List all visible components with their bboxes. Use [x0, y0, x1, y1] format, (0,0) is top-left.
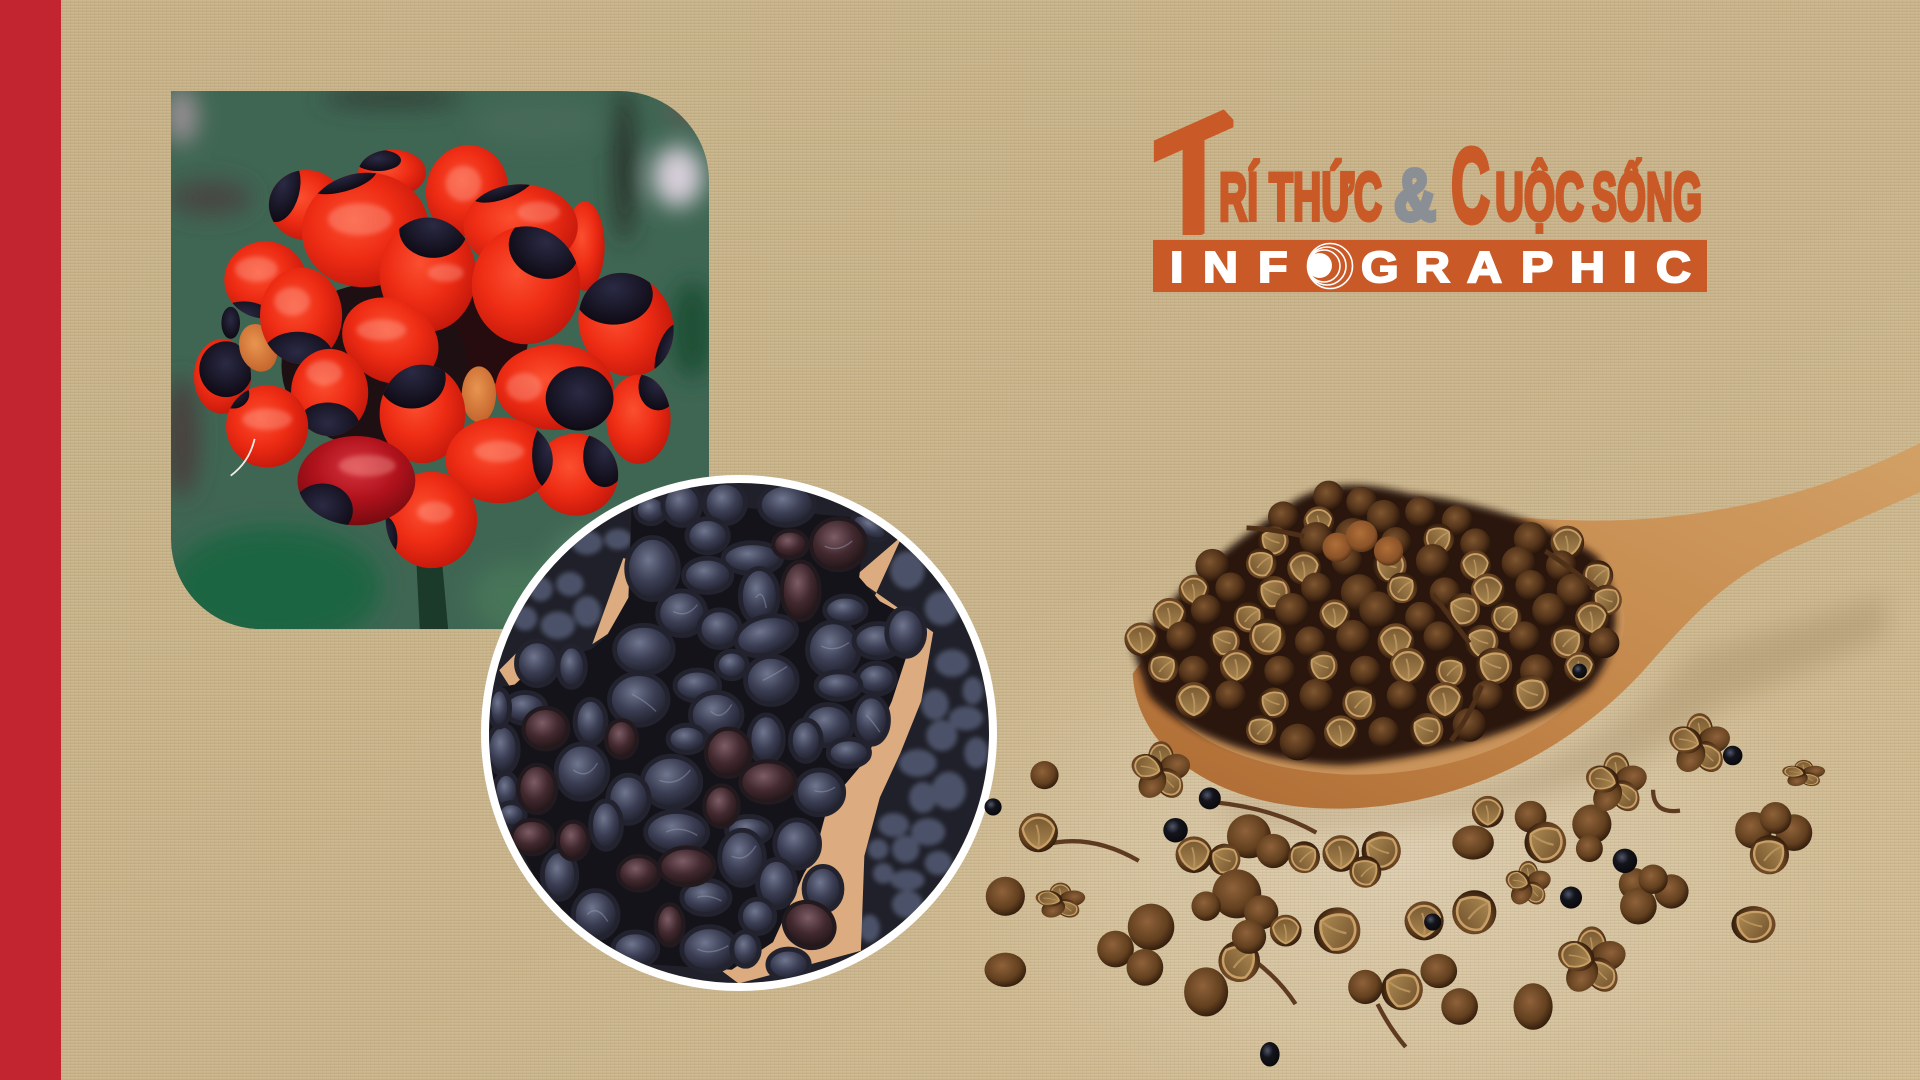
photo: red ginseng berries: [164, 87, 714, 648]
logo wordmark: &: [1394, 156, 1436, 236]
pepper heap base: [1133, 485, 1615, 765]
dark seed bed: [484, 498, 918, 970]
black seeds: [984, 746, 1742, 1067]
dark cluster centre: [454, 296, 528, 384]
red side band: [0, 0, 61, 1080]
berry highlights: [235, 166, 560, 523]
seed wrinkles: [573, 541, 880, 952]
logo wordmark: RÍ THỨC: [1219, 159, 1382, 235]
pepper pods in spoon: [1124, 481, 1627, 760]
white ring: [485, 479, 993, 987]
banner text GRAPHIC: GRAPHIC: [1361, 242, 1691, 292]
sharp seeds: [487, 482, 925, 980]
blurred background seeds: [513, 529, 988, 942]
circular photo: dried black seeds on wooden scoop: [480, 475, 1000, 995]
logo banner: [1153, 240, 1707, 292]
blurred foliage backdrop: [164, 87, 714, 648]
banner text INF: INF: [1170, 242, 1288, 292]
logo wordmark: T: [1154, 73, 1233, 289]
logo ring icon: [1307, 244, 1352, 288]
scattered pepper pods: [984, 713, 1828, 1030]
berries: [194, 139, 693, 568]
wooden spoon with Sichuan pepper: [984, 443, 1920, 1067]
stem: [416, 566, 448, 629]
logo: Tri thức & Cuộc sống Infographic: [1153, 110, 1707, 292]
spoon shadow: [1224, 594, 1886, 824]
logo wordmark: C: [1451, 127, 1490, 245]
orange pods and twigs in heap: [1247, 520, 1598, 741]
scattered pepper stems: [1044, 790, 1680, 1047]
spoon body: [1133, 443, 1920, 809]
logo wordmark: UỘC: [1495, 158, 1584, 235]
wooden scoop: [499, 536, 933, 983]
bowl interior: [1141, 520, 1625, 775]
logo wordmark: [1154, 110, 1701, 235]
logo wordmark: SỐNG: [1592, 158, 1702, 235]
